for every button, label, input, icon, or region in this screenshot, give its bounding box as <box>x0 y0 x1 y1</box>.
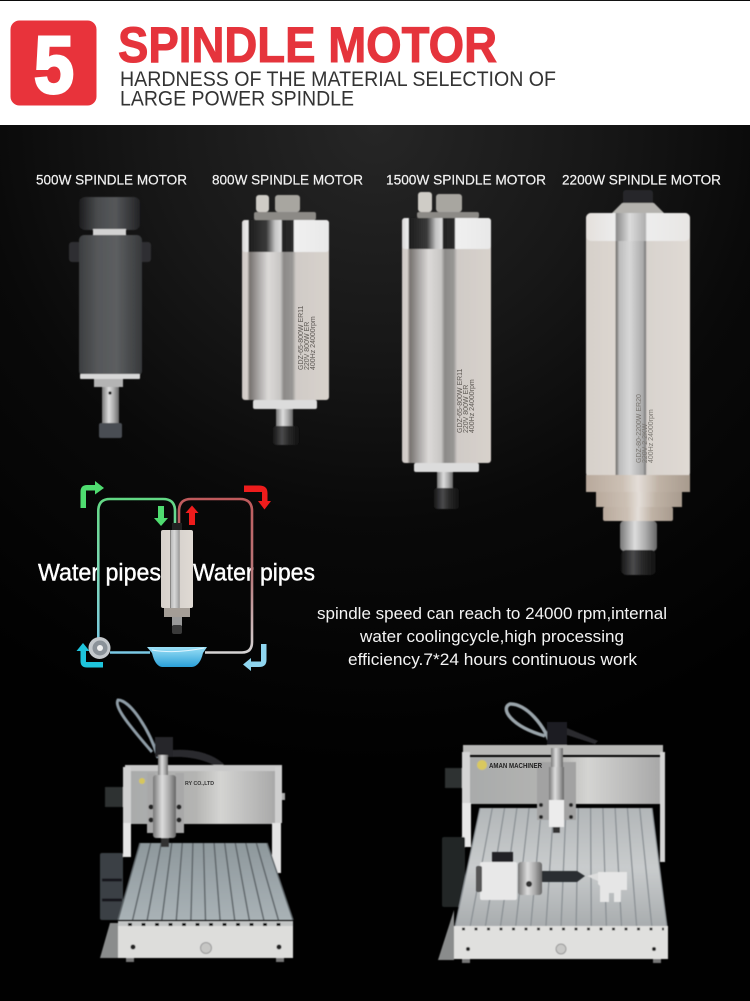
subtitle <box>120 68 556 110</box>
arrow: red up <box>186 506 198 525</box>
arrow: cyan up-left <box>76 643 103 668</box>
engraved nameplate: 220V 2.2KW <box>642 423 649 463</box>
label: water pipes left: Water pipes <box>38 560 161 586</box>
water basin <box>147 647 207 667</box>
engraved nameplate: 220V 800W ER <box>304 322 311 370</box>
engraved nameplate: GDZ-65-800W ER11 <box>457 368 464 433</box>
arrow: green up-right <box>80 481 104 508</box>
description text: efficiency.7*24 hours continuous work <box>348 651 638 669</box>
water cooling diagram <box>38 481 315 671</box>
engraved nameplate: 400Hz 24000rpm <box>310 316 317 370</box>
header band <box>0 1 750 125</box>
2200W spindle <box>586 190 690 575</box>
arrow: green down <box>154 506 168 526</box>
number badge: 5 <box>34 20 74 110</box>
spindle labels: 1500W SPINDLE MOTOR <box>386 172 546 188</box>
engraved nameplate <box>298 305 317 370</box>
description text <box>317 605 667 669</box>
CNC machine left <box>100 700 293 962</box>
water pump <box>88 637 110 659</box>
500W spindle <box>69 197 151 438</box>
description text: water coolingcycle,high processing <box>359 628 624 646</box>
number badge <box>10 20 96 110</box>
subtitle: LARGE POWER SPINDLE <box>120 88 354 110</box>
800W spindle <box>242 195 329 445</box>
engraved nameplate <box>457 368 476 433</box>
spindle labels <box>36 172 721 188</box>
engraved nameplate: 220V 800W ER <box>463 385 470 433</box>
engraved nameplate: 400Hz 24000rpm <box>469 379 476 433</box>
spindle labels: 2200W SPINDLE MOTOR <box>562 172 721 188</box>
label: water pipes right: Water pipes <box>193 560 315 586</box>
engraved nameplate: GDZ-80-2200W ER20 <box>636 394 643 463</box>
machine plate brand: AMAN MACHINER <box>489 761 542 770</box>
machine plate text: RY CO.,LTD <box>185 781 214 787</box>
green supply pipe <box>98 499 175 652</box>
engraved nameplate: GDZ-65-800W ER11 <box>298 305 305 370</box>
arrow: light blue down-left <box>243 644 266 671</box>
description text: spindle speed can reach to 24000 rpm,internal <box>317 605 667 623</box>
rotary axis attachment <box>476 852 627 902</box>
engraved nameplate <box>636 394 655 463</box>
spindle labels: 800W SPINDLE MOTOR <box>212 172 363 188</box>
red return pipe <box>179 499 252 652</box>
title: SPINDLE MOTOR <box>118 17 497 73</box>
mini spindle <box>161 523 193 634</box>
arrow: red right-down <box>244 486 271 510</box>
1500W spindle <box>402 192 491 509</box>
spindle labels: 500W SPINDLE MOTOR <box>36 172 187 188</box>
CNC machine right <box>438 704 668 963</box>
engraved nameplate: 400Hz 24000rpm <box>648 409 655 463</box>
subtitle: HARDNESS OF THE MATERIAL SELECTION OF <box>120 68 556 91</box>
